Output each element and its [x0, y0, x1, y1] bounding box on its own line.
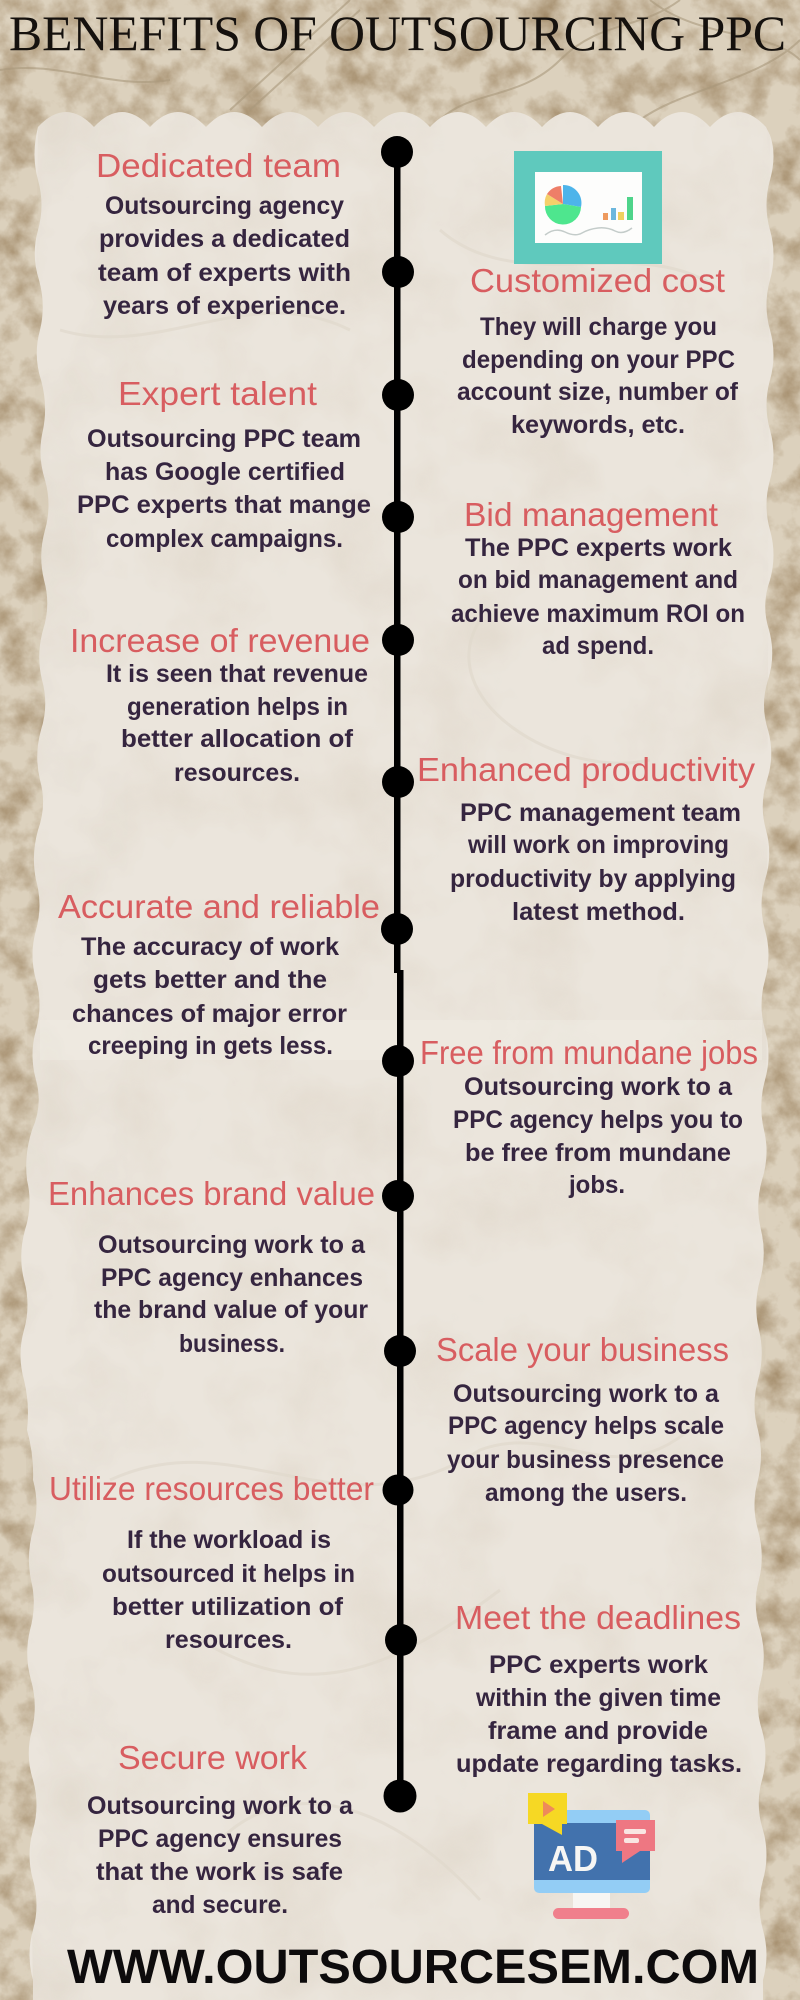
body text: will work on improving — [467, 831, 729, 859]
body text: be free from mundane — [465, 1139, 731, 1167]
body text: your business presence — [447, 1446, 724, 1474]
benefit: Customized cost — [457, 262, 739, 439]
body text — [106, 660, 368, 787]
heading: Dedicated team — [96, 147, 341, 184]
body text — [457, 313, 739, 439]
body text: provides a dedicated — [99, 225, 350, 253]
body text: They will charge you — [480, 313, 717, 341]
body text: frame and provide — [488, 1717, 708, 1745]
body text: latest method. — [512, 898, 685, 926]
benefit: Dedicated team — [96, 147, 351, 320]
body text: ad spend. — [542, 632, 654, 660]
body text — [451, 534, 745, 660]
body text: PPC agency helps scale — [448, 1412, 724, 1440]
body text — [447, 1380, 724, 1507]
heading: Enhances brand value — [48, 1175, 375, 1212]
heading: Increase of revenue — [70, 622, 370, 659]
body text: creeping in gets less. — [88, 1032, 333, 1060]
heading: Scale your business — [436, 1331, 729, 1368]
body text — [453, 1073, 743, 1199]
body text: PPC experts that mange — [77, 491, 371, 519]
benefit: Expert talent — [77, 375, 371, 553]
body text — [77, 425, 371, 553]
body text: update regarding tasks. — [456, 1750, 742, 1778]
body text: keywords, etc. — [511, 411, 685, 439]
body text: Outsourcing work to a — [464, 1073, 733, 1101]
body text — [450, 799, 741, 926]
body text: chances of major error — [72, 1000, 347, 1028]
heading: Accurate and reliable — [58, 888, 380, 925]
benefit: Enhances brand value — [48, 1175, 375, 1358]
icon: AD monitor — [528, 1793, 655, 1919]
icon: analytics dashboard — [514, 151, 662, 264]
heading: Utilize resources better — [49, 1470, 374, 1507]
body text: within the given time — [475, 1684, 721, 1712]
body text: gets better and the — [93, 966, 327, 994]
body text: team of experts with — [98, 259, 351, 287]
body text — [94, 1231, 368, 1358]
heading: Expert talent — [118, 375, 317, 412]
body text: business. — [179, 1330, 285, 1358]
body text: Outsourcing work to a — [98, 1231, 366, 1259]
benefit: Meet the deadlines — [455, 1599, 742, 1778]
body text — [87, 1792, 354, 1919]
body text: better allocation of — [121, 725, 354, 753]
title: BENEFITS OF OUTSOURCING PPC — [9, 5, 786, 61]
body text: Outsourcing agency — [105, 192, 344, 220]
heading: Meet the deadlines — [455, 1599, 741, 1636]
body text: among the users. — [485, 1479, 687, 1507]
body text: achieve maximum ROI on — [451, 600, 745, 628]
body text: productivity by applying — [450, 865, 736, 893]
benefit: Utilize resources better — [49, 1470, 374, 1654]
body text: If the workload is — [127, 1526, 331, 1554]
body text: It is seen that revenue — [106, 660, 368, 688]
body text: account size, number of — [457, 378, 739, 406]
body text — [102, 1526, 355, 1654]
heading: Free from mundane jobs — [420, 1034, 758, 1071]
body text: Outsourcing PPC team — [87, 425, 361, 453]
body text: and secure. — [152, 1891, 288, 1919]
body text: resources. — [174, 759, 300, 787]
heading: Bid management — [464, 496, 718, 533]
body text: The accuracy of work — [81, 933, 339, 961]
body text: outsourced it helps in — [102, 1560, 355, 1588]
heading: Secure work — [118, 1739, 308, 1776]
benefit: Increase of revenue — [70, 622, 370, 787]
body text — [72, 933, 347, 1060]
benefit: Scale your business — [436, 1331, 729, 1507]
body text: complex campaigns. — [106, 525, 343, 553]
body text: PPC management team — [460, 799, 741, 827]
benefit: Bid management — [451, 496, 745, 660]
body text — [98, 192, 351, 320]
icon: AD monitor: AD — [548, 1838, 598, 1879]
heading: Enhanced productivity — [417, 751, 756, 788]
body text: depending on your PPC — [462, 346, 735, 374]
body text: that the work is safe — [96, 1858, 343, 1886]
benefit: Secure work — [87, 1739, 354, 1919]
timeline — [381, 136, 417, 1812]
body text: better utilization of — [112, 1593, 344, 1621]
body text: years of experience. — [103, 292, 346, 320]
benefit: Enhanced productivity — [417, 751, 756, 926]
body text: resources. — [165, 1626, 292, 1654]
body text: PPC agency enhances — [101, 1264, 363, 1292]
body text: generation helps in — [127, 693, 348, 721]
body text — [456, 1651, 742, 1778]
footer website: WWW.OUTSOURCESEM.COM — [67, 1941, 759, 1994]
body text: PPC agency helps you to — [453, 1106, 743, 1134]
body text: the brand value of your — [94, 1296, 368, 1324]
body text: on bid management and — [458, 566, 738, 594]
benefit: Free from mundane jobs — [420, 1034, 758, 1199]
body text: PPC agency ensures — [98, 1825, 342, 1853]
body text: has Google certified — [105, 458, 345, 486]
body text: Outsourcing work to a — [87, 1792, 354, 1820]
benefit: Accurate and reliable — [58, 888, 380, 1060]
body text: The PPC experts work — [465, 534, 732, 562]
body text: Outsourcing work to a — [453, 1380, 720, 1408]
heading: Customized cost — [470, 262, 725, 299]
body text: PPC experts work — [489, 1651, 708, 1679]
body text: jobs. — [568, 1171, 625, 1199]
